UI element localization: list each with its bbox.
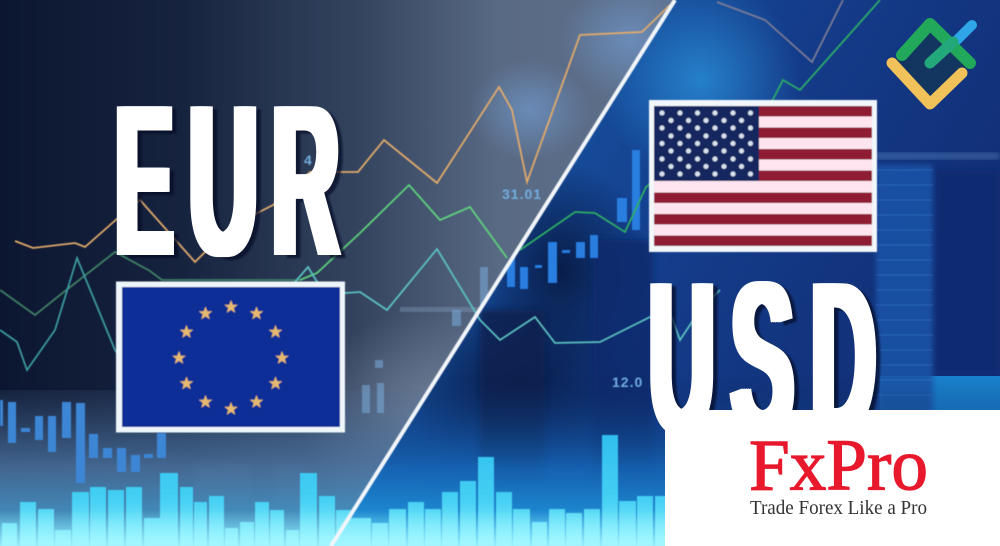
USD heading [649,236,882,478]
chart price labels: 4 [304,152,312,168]
EU flag [116,282,345,432]
right candlesticks [507,150,640,289]
candlesticks [0,400,166,483]
infographic canvas: U [188,59,257,301]
US flag [649,100,877,252]
infographic canvas: U [649,236,714,478]
EU stars [172,300,289,415]
icon: LiteFinance logo [892,24,972,104]
tagline: Trade Forex Like a Pro [750,497,927,519]
chart price labels: 31.01 [502,186,542,202]
infographic canvas: E [115,59,173,301]
orange line [15,5,670,262]
right panel background [334,0,1000,546]
volume bars [2,435,667,546]
FxPro wordmark: FxPro [749,424,928,506]
EUR heading [115,59,346,301]
green line [0,252,300,315]
chart price labels: 12.0 [612,374,643,390]
US stars [660,110,753,176]
diagonal divider [331,0,675,546]
chart price labels [304,152,643,390]
infographic canvas: S [731,236,794,478]
left panel background [0,0,675,546]
line charts [0,0,880,370]
FxPro white box [665,410,1000,546]
teal line [0,258,130,370]
coin stacks [480,170,1000,480]
infographic canvas: D [811,236,876,478]
infographic canvas: R [272,59,339,301]
